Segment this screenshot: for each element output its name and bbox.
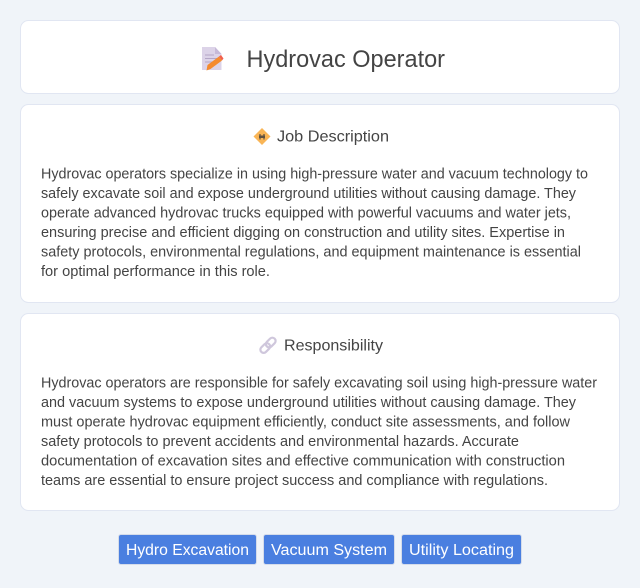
text block: responsibility: teams are essential to ensure project success and compliance with regulations. [41, 473, 548, 489]
icon: document with pencil [202, 47, 224, 70]
tag: utility locating: Utility Locating [409, 542, 514, 559]
text block: responsibility: documentation of excavation sites and effective communication with construction [41, 454, 565, 470]
panel: title header [20, 20, 620, 94]
text block: job description: Hydrovac operators specialize in using high-pressure water and vacuum technology to [41, 166, 588, 182]
icon: construction diamond sign [254, 128, 270, 145]
text block: responsibility: and vacuum systems to expose underground utilities without causing damage. They [41, 395, 577, 411]
text block: responsibility: must operate hydrovac equipment efficiently, conduct site assessments, and follow [41, 414, 571, 430]
text block: job description: ensuring precise and efficient digging on construction and utility sites. Expertise in [41, 225, 565, 241]
tag: utility locating [402, 534, 522, 564]
text block: job description [41, 166, 588, 280]
tag: vacuum system: Vacuum System [271, 542, 387, 559]
text block: responsibility: safety protocols to prevent accidents and environmental hazards. Accurate [41, 434, 519, 450]
title: Hydrovac Operator [246, 46, 445, 73]
text block: responsibility [41, 376, 597, 489]
heading: job description: Job Description [277, 128, 389, 146]
tag: hydro excavation: Hydro Excavation [126, 542, 249, 559]
icon: chain link [259, 336, 277, 354]
text block: responsibility: Hydrovac operators are responsible for safely excavating soil using high-pressure water [41, 376, 597, 392]
text block: job description: operate advanced hydrovac trucks equipped with powerful vacuums and water jets, [41, 206, 571, 222]
panel: job description [20, 104, 620, 302]
tag: hydro excavation [118, 534, 256, 564]
text block: job description: safety protocols, environmental regulations, and equipment maintenance is essential [41, 244, 581, 260]
tag: vacuum system [264, 534, 394, 564]
text block: job description: safely excavate soil and expose underground utilities without causing damage. They [41, 186, 577, 202]
text block: job description: for optimal performance in this role. [41, 264, 270, 280]
panel: responsibility [20, 314, 620, 510]
heading: responsibility: Responsibility [284, 338, 383, 354]
